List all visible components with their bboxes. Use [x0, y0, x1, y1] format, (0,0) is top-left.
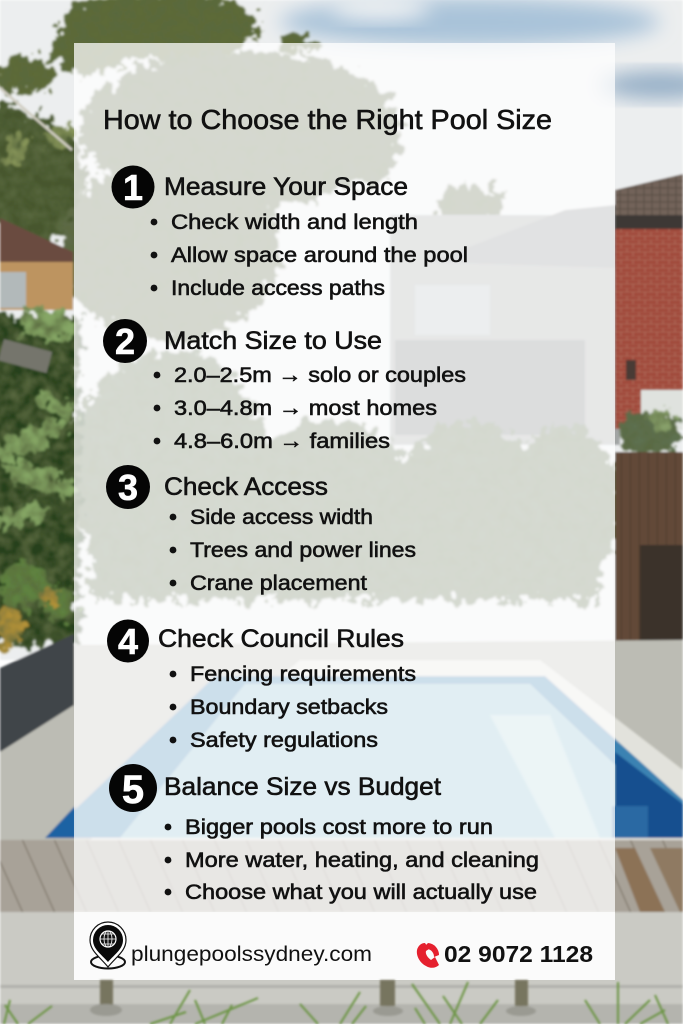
- step 3: Check Access: [106, 465, 416, 595]
- number badge 5: [109, 764, 157, 812]
- bullet list: Choose what you will actually use: [185, 880, 537, 904]
- footer contact row: [90, 922, 593, 968]
- number badge 1: [112, 166, 154, 208]
- number badge 2: [103, 319, 147, 363]
- number badge 4: 4: [118, 621, 138, 662]
- number badge 5: 5: [122, 768, 144, 812]
- timber fence: [615, 452, 683, 664]
- icon: location pin with globe: [90, 922, 126, 968]
- number badge 3: 3: [118, 467, 138, 508]
- number badge 3: [106, 465, 150, 509]
- bullet list: Boundary setbacks: [190, 695, 388, 719]
- heading: Measure Your Space: [164, 173, 408, 201]
- paving around the pool: [0, 640, 683, 840]
- ornamental grass: [4, 982, 668, 1024]
- bullet list: Check width and length: [171, 210, 418, 234]
- middle house: [390, 205, 620, 445]
- bullet list: [170, 662, 416, 752]
- gum tree: [0, 0, 504, 340]
- bullet list: Fencing requirements: [190, 662, 416, 686]
- footer backing strip: [74, 912, 615, 980]
- step 1: Measure Your Space: [112, 166, 468, 300]
- number badge 4: [107, 620, 149, 662]
- bullet list: Crane placement: [190, 571, 367, 595]
- number badge 1: 1: [123, 167, 143, 208]
- title: How to Choose the Right Pool Size: [103, 104, 552, 135]
- heading: Match Size to Use: [164, 327, 382, 355]
- left house: [0, 218, 73, 310]
- bullet list: Safety regulations: [190, 728, 378, 752]
- dark planter box: [0, 634, 74, 752]
- bullet list: [170, 505, 416, 595]
- bullet list: 2.0–2.5m → solo or couples: [174, 363, 466, 387]
- swimming pool water: [45, 676, 683, 838]
- heading: Check Access: [164, 473, 328, 501]
- right brick house: [615, 174, 683, 430]
- step 4: Check Council Rules: [107, 620, 416, 752]
- number badge 2: 2: [115, 321, 135, 362]
- step 2: Match Size to Use: [103, 319, 466, 453]
- shrubs behind panel and at fence: [70, 350, 682, 600]
- panel: translucent white content card: [74, 43, 615, 980]
- bullet list: More water, heating, and cleaning: [185, 848, 539, 872]
- bullet list: Include access paths: [171, 276, 385, 300]
- heading: Check Council Rules: [158, 625, 404, 653]
- tropical planting on the left: [0, 309, 81, 650]
- heading: Balance Size vs Budget: [164, 773, 441, 801]
- bullet list: Allow space around the pool: [171, 243, 468, 267]
- sky: [0, 0, 683, 660]
- bullet list: [151, 210, 468, 300]
- bullet list: [165, 815, 539, 904]
- phone number: 02 9072 1128: [444, 941, 593, 967]
- bullet list: Trees and power lines: [190, 538, 416, 562]
- bullet list: [154, 363, 466, 453]
- faint canopy behind the panel: [60, 50, 504, 340]
- bullet list: 4.8–6.0m → families: [174, 429, 390, 453]
- icon: red phone: [417, 943, 439, 968]
- bullet list: Side access width: [190, 505, 373, 529]
- timber deck: [0, 840, 683, 912]
- bullet list: 3.0–4.8m → most homes: [174, 396, 437, 420]
- glass fence posts: [90, 980, 536, 1016]
- concrete paving: [0, 912, 683, 1024]
- bullet list: Bigger pools cost more to run: [185, 815, 493, 839]
- website: plungepoolssydney.com: [131, 943, 372, 966]
- step 5: Balance Size vs Budget: [109, 764, 539, 904]
- light coping: [90, 660, 683, 840]
